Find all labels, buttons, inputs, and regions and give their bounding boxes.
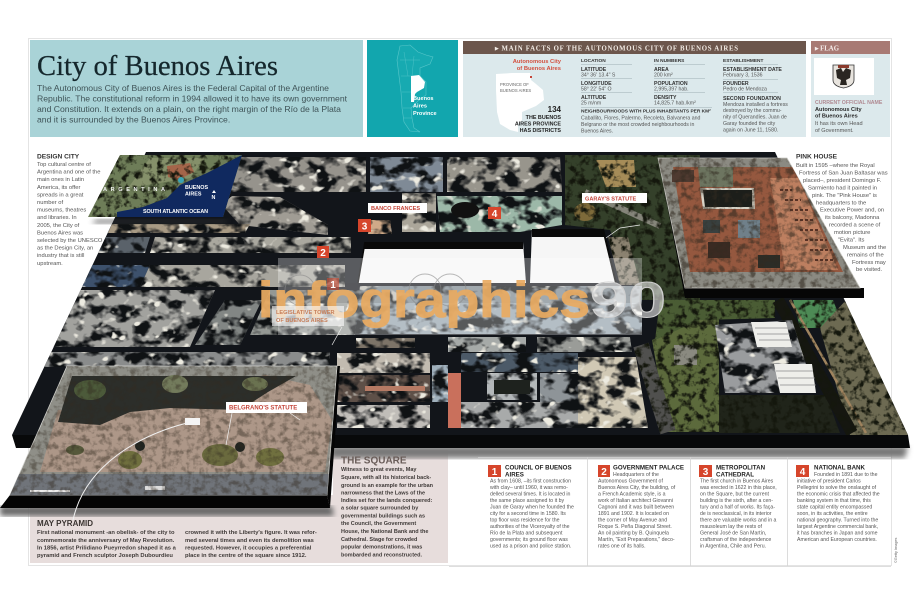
label: Autonomous City of Buenos Aires: Autonomous City bbox=[513, 59, 562, 65]
label: South Atlantic Ocean: SOUTH ATLANTIC OCEAN bbox=[143, 209, 208, 215]
label: province of Buenos Aires: PROVINCE OF bbox=[500, 82, 529, 87]
flag text: Autonomous City bbox=[815, 107, 862, 113]
label: Banco Frances: BANCO FRANCES bbox=[371, 206, 420, 212]
main aerial view of the city bbox=[12, 152, 910, 458]
districts figure: 134 bbox=[548, 105, 562, 114]
text: Pink House: be visited. bbox=[856, 267, 882, 273]
facts column: in numbers: DENSITY bbox=[654, 95, 677, 101]
text: May Pyramid: requested. However, it occupies a preferential bbox=[185, 546, 312, 552]
icon: north arrow bbox=[212, 190, 216, 201]
text: The Square: Indies set for the lands conquered: bbox=[341, 498, 433, 504]
introduction text: and Constitution. It extends on a plain, on the right margin of the Río de la Plata bbox=[37, 104, 341, 114]
districts figure: AIRES PROVINCE bbox=[515, 122, 561, 128]
facts column: in numbers: AREA bbox=[654, 67, 669, 73]
body: a French Academic style, is a bbox=[598, 492, 666, 498]
marker 4: 4 bbox=[492, 209, 498, 220]
text: The Square: Witness to great events, May bbox=[341, 467, 417, 473]
text: Pink House: PINK HOUSE bbox=[796, 154, 838, 160]
facts column: location: ALTITUDE bbox=[581, 95, 607, 101]
text: May Pyramid bbox=[37, 519, 317, 559]
text: The Square bbox=[341, 456, 434, 558]
body: top floor was residence for the bbox=[490, 518, 560, 524]
facts column: location: 58° 22' 54" O bbox=[581, 86, 612, 92]
heading: NATIONAL BANK bbox=[814, 464, 866, 472]
text: The Square: narrowness that the Laws of the bbox=[341, 490, 425, 496]
facts heading bar bbox=[463, 41, 806, 54]
label: Garay's Statute: GARAY'S STATUTE bbox=[585, 196, 637, 202]
text: May Pyramid: First national monument -an obelisk- of the city to bbox=[37, 530, 175, 536]
body: state capital entity encompassed bbox=[797, 504, 872, 510]
facts column: establishment: Mendoza installed a fortress bbox=[723, 102, 788, 108]
map: Buenos Aires Province silhouette bbox=[496, 73, 544, 132]
label: Buenos Aires Province: Aires bbox=[413, 104, 427, 110]
text: Pink House: Fortress may bbox=[852, 260, 886, 266]
body: national geography. Turned into the bbox=[797, 518, 878, 524]
body: rates one of its halls. bbox=[598, 544, 646, 550]
watermark bbox=[258, 258, 666, 335]
body: An oil painting by B. Quinquela bbox=[598, 530, 669, 536]
column: National Bank bbox=[796, 464, 880, 543]
body: delled several times. It is located in bbox=[490, 492, 571, 498]
text: Pink House: "Evita". Its bbox=[838, 238, 864, 244]
facts column: in numbers: 200 km² bbox=[654, 72, 673, 78]
facts column: in numbers: 14,825.7 hab./km² bbox=[654, 100, 696, 106]
body: in Argentina, Chile and Peru. bbox=[700, 544, 766, 550]
facts column: establishment: ESTABLISHMENT bbox=[723, 58, 763, 64]
facts column: in numbers: POPULATION bbox=[654, 81, 688, 87]
icon: north arrow: N bbox=[212, 195, 216, 201]
number 4: 4 bbox=[800, 467, 806, 478]
locator map panel: Buenos Aires Province bbox=[367, 40, 458, 137]
text: The Square: a solar square surrounded by bbox=[341, 506, 419, 512]
flag text: of Government. bbox=[815, 128, 854, 134]
text: Design City: spreads in a great bbox=[37, 192, 84, 198]
facts column: in numbers bbox=[581, 58, 712, 108]
text: Design City: as the Design City, an bbox=[37, 246, 93, 252]
body: banking system in that time, this bbox=[797, 498, 871, 504]
text: Design City bbox=[37, 154, 103, 267]
text: Pink House: Fortress of San Juan Baltasar was bbox=[799, 170, 888, 176]
districts figure: THE BUENOS bbox=[526, 115, 561, 121]
facts column: location bbox=[581, 58, 632, 106]
text: May Pyramid: commemorate the anniversary of May Revolution. bbox=[37, 538, 175, 544]
text: May Pyramid: In 1856, artist Prilidiano Pueyrredon shaped it as a bbox=[37, 546, 177, 552]
label: Legislative Tower of Buenos Aires: OF BUENOS AIRES bbox=[276, 318, 328, 324]
marker 2: 2 bbox=[320, 248, 326, 259]
inset aerial: Pink House bbox=[650, 155, 870, 298]
flag text: It has its own Head bbox=[815, 121, 863, 127]
body: governments; its ground floor was bbox=[490, 537, 568, 543]
number 1: 1 bbox=[492, 467, 498, 478]
body: the economic crisis that affected the bbox=[797, 492, 880, 498]
text: Pink House: placed–, president Domingo F. bbox=[803, 178, 882, 184]
facts heading bar: ▸ MAIN FACTS OF THE AUTONOMOUS CITY OF BUENOS AIRES bbox=[494, 46, 738, 52]
text: Design City: upstream. bbox=[37, 261, 63, 267]
text: Pink House: pink. The "Pink House" is bbox=[812, 193, 877, 199]
column: Metropolitan Cathedral bbox=[699, 464, 777, 550]
body: used as a prison and police station. bbox=[490, 544, 571, 550]
body: building is the sixth, after a cen- bbox=[700, 498, 773, 504]
parks and green areas bbox=[565, 155, 908, 435]
text: Pink House bbox=[796, 154, 888, 273]
text: The Square: THE SQUARE bbox=[341, 456, 407, 466]
body: there are valuable works and in a bbox=[700, 518, 777, 524]
body: on the Square, but the current bbox=[700, 492, 769, 498]
city blocks bbox=[40, 157, 815, 428]
body: General José de San Martín, bbox=[700, 530, 766, 536]
panel: flag bbox=[811, 41, 890, 137]
marker 2 bbox=[317, 246, 329, 259]
body: soon, in its activities, the entire bbox=[797, 511, 868, 517]
text: Pink House: Built in 1595 –where the Royal bbox=[796, 163, 875, 169]
body: tury and a half of works. Its faça- bbox=[700, 504, 775, 510]
inset aerial: May Square bbox=[0, 360, 340, 516]
leader line: Garay's statute bbox=[606, 225, 640, 238]
body: largest Argentine commercial bank, bbox=[797, 524, 878, 530]
label: Legislative Tower of Buenos Aires bbox=[272, 306, 344, 326]
text: Design City: industry that is still bbox=[37, 253, 84, 259]
body: The first church in Buenos Aires bbox=[700, 478, 774, 484]
body: Pellegrini to solve the onslaught of bbox=[797, 485, 877, 491]
heading: COUNCIL OF BUENOS bbox=[505, 464, 572, 472]
facts: neighbourhoods: Buenos Aires. bbox=[581, 128, 613, 134]
text: Pink House: recorded a scene of bbox=[829, 223, 881, 229]
heading: CATHEDRAL bbox=[716, 472, 754, 478]
label: Buenos Aires: AIRES bbox=[185, 192, 202, 198]
text: The Square: bombarded and reconstructed. bbox=[341, 552, 422, 558]
flag image bbox=[814, 58, 874, 95]
facts column: location: 34° 36' 13.4" S bbox=[581, 72, 616, 78]
text: May Pyramid: med several times and even its demolition was bbox=[185, 538, 314, 544]
introduction text: and it is surrounded by the Buenos Aires Province. bbox=[37, 114, 230, 124]
label: Buenos Aires: BUENOS bbox=[185, 185, 208, 191]
text: Design City: Buenos Aires was bbox=[37, 230, 83, 236]
body: Juan de Garay when he founded the bbox=[490, 504, 574, 510]
column: Council of Buenos Aires bbox=[488, 464, 574, 550]
body: initiative of president Carlos bbox=[797, 478, 861, 484]
text: Design City: DESIGN CITY bbox=[37, 154, 80, 160]
number 3: 3 bbox=[703, 467, 709, 478]
label: Garay's Statute bbox=[582, 193, 647, 203]
label: province of Buenos Aires: BUENOS AIRES bbox=[500, 88, 531, 93]
facts column: location: LONGITUDE bbox=[581, 81, 612, 87]
text: May Pyramid: place in the centre of the square since 1912. bbox=[185, 553, 307, 559]
text: May Pyramid: pyramid and French sculptor Joseph Dubourdieu bbox=[37, 553, 173, 559]
map: Buenos Aires Province highlighted bbox=[411, 75, 425, 102]
current official name: CURRENT OFFICIAL NAME bbox=[815, 100, 883, 106]
text: The Square: the Council, the Government bbox=[341, 521, 416, 527]
facts column: establishment: again on June 11, 1580. bbox=[723, 128, 778, 134]
body: de is neoclassical, in its interior bbox=[700, 511, 772, 517]
text: Design City: Top cultural centre of bbox=[37, 162, 91, 168]
facts: neighbourhoods bbox=[581, 108, 711, 134]
body: Roque S. Peña Diagonal Street. bbox=[598, 524, 672, 530]
facts column: establishment: February 3, 1536 bbox=[723, 72, 763, 78]
text: May Pyramid: MAY PYRAMID bbox=[37, 519, 93, 528]
text: Design City: main ones in Latin bbox=[37, 177, 84, 183]
body: authorities of the Viceroyalty of the bbox=[490, 524, 570, 530]
text: The Square: Cathedral. Stage for crowded bbox=[341, 537, 417, 543]
text: Design City: museums, theatres bbox=[37, 208, 86, 214]
body: Cagnoni and it was built between bbox=[598, 504, 674, 510]
label: Belgrano's Statute bbox=[226, 402, 307, 413]
number 2: 2 bbox=[601, 467, 607, 478]
label: Buenos Aires Province: Buenos bbox=[413, 96, 434, 102]
Autonomous City marker bbox=[530, 76, 532, 78]
body: mausoleum lay the rests of bbox=[700, 524, 763, 530]
text: Design City: Argentina and one of the bbox=[37, 170, 100, 176]
facts column: establishment: Pedro de Mendoza bbox=[723, 86, 767, 92]
body: craftsman of the independence bbox=[700, 537, 771, 543]
title: City of Buenos Aires bbox=[37, 51, 278, 82]
leader line: legislative tower bbox=[332, 327, 342, 345]
label: Buenos Aires Province: Province bbox=[413, 111, 437, 117]
facts column: establishment: FOUNDER bbox=[723, 81, 749, 87]
text: Pink House: motion picture bbox=[834, 230, 870, 236]
text: The Square: Square, with all its historical back- bbox=[341, 475, 431, 481]
text: Design City: selected by the UNESCO bbox=[37, 238, 103, 244]
facts column: location: LATITUDE bbox=[581, 67, 607, 73]
facts: neighbourhoods: Belgrano or the most crowded neighbourhoods in bbox=[581, 122, 694, 128]
flag text: of Buenos Aires bbox=[815, 114, 858, 120]
facts column: location: LOCATION bbox=[581, 58, 606, 64]
marker 1: 1 bbox=[330, 280, 336, 291]
text: Pink House: remains of the bbox=[847, 252, 884, 258]
body: Martín, "Exit Preparations," deco- bbox=[598, 537, 675, 543]
watermark: infographics bbox=[258, 272, 590, 328]
flag heading bar: ▸ FLAG bbox=[814, 46, 840, 52]
marker 1 bbox=[327, 278, 339, 291]
facts column: location: 25 m/nm bbox=[581, 100, 601, 106]
heading: AIRES bbox=[505, 472, 524, 478]
body: the same place assigned to it by bbox=[490, 498, 565, 504]
text: The Square: popular demonstrations, it was bbox=[341, 545, 422, 551]
body: with clay– until 1960, it was remo- bbox=[490, 485, 568, 491]
body: the corner of May Avenue and bbox=[598, 518, 667, 524]
leader line: May Pyramid bbox=[73, 423, 187, 520]
text: May Pyramid: crowned it with the Liberty's figure. It was refor- bbox=[185, 530, 317, 536]
body: it has branches in Japan and some bbox=[797, 530, 878, 536]
facts column: establishment: ESTABLISHMENT DATE bbox=[723, 67, 782, 73]
facts column: establishment: Garay founded the city bbox=[723, 121, 776, 127]
body: Headquarters of the bbox=[613, 472, 659, 478]
text: The Square: ground is an example for the urban bbox=[341, 483, 434, 489]
text: Pink House: Sarmiento had it painted in bbox=[808, 185, 877, 191]
inset map: Argentina and South Atlantic Ocean bbox=[88, 155, 242, 224]
text: Design City: and libraries. In bbox=[37, 215, 77, 221]
body: Buenos Aires City, the building, of bbox=[598, 485, 676, 491]
facts column: establishment bbox=[723, 58, 788, 134]
facts column: establishment: destroyed by the commu- bbox=[723, 108, 782, 114]
body: Founded in 1891 due to the bbox=[814, 472, 878, 478]
text: Pink House: Executive Power and, on bbox=[820, 208, 884, 214]
label: Banco Frances bbox=[368, 203, 427, 213]
body: work of Italian architect Giovanni bbox=[598, 498, 673, 504]
text: Pink House: its balcony, Madonna bbox=[825, 215, 880, 221]
header panel: title and introduction bbox=[30, 40, 363, 137]
body: American and European countries. bbox=[797, 537, 877, 543]
marker 4 bbox=[488, 207, 501, 220]
marker 3: 3 bbox=[362, 222, 368, 232]
body: Río de la Plata and subsequent bbox=[490, 530, 563, 536]
empty building footprint: left bbox=[358, 242, 526, 283]
facts column: in numbers: IN NUMBERS bbox=[654, 58, 685, 64]
facts column: in numbers: 2,995,397 hab. bbox=[654, 86, 689, 92]
text: The Square: governmental buildings such as bbox=[341, 514, 425, 520]
text: Pink House: headquarters to the bbox=[816, 200, 866, 206]
panel: main facts bbox=[463, 41, 806, 137]
text: The Square: House, the National Bank and the bbox=[341, 529, 428, 535]
facts column: establishment: nity of Querandíes. Juan de bbox=[723, 114, 787, 120]
label: Belgrano's Statute: BELGRANO'S STATUTE bbox=[229, 406, 297, 412]
text: Design City: 2005, the City of bbox=[37, 223, 80, 229]
text: Design City: number of bbox=[37, 200, 63, 206]
heading: METROPOLITAN bbox=[716, 464, 766, 472]
panel: The Square and May Pyramid background bbox=[30, 450, 448, 563]
facts: neighbourhoods: Caballito, Flores, Palermo, Recoleta, Balvanera and bbox=[581, 116, 700, 122]
leader line: Belgrano's statute bbox=[226, 413, 300, 445]
heading: GOVERNMENT PALACE bbox=[613, 464, 684, 472]
map: outline of Argentina bbox=[397, 45, 433, 132]
body: 1891 and 1902. It is located on bbox=[598, 511, 669, 517]
districts figure: HAS DISTRICTS bbox=[520, 128, 561, 134]
introduction text: The Autonomous City of Buenos Aires is the Federal Capital of the Argentine bbox=[37, 83, 329, 93]
watermark: 90 bbox=[590, 272, 666, 328]
label: Autonomous City of Buenos Aires: of Buenos Aires bbox=[517, 66, 561, 72]
facts: neighbourhoods: NEIGHBOURHOODS WITH PLUS INHABITANTS PER KM² bbox=[581, 108, 711, 114]
text: Design City: America, its offer bbox=[37, 185, 80, 191]
body: city for a second time in 1580. Its bbox=[490, 511, 566, 517]
body: Autonomous Government of bbox=[598, 478, 663, 484]
marker 3 bbox=[358, 219, 371, 232]
body: was erected in 1622 in this place, bbox=[700, 485, 777, 491]
introduction text: Republic. The constitutional reform in 1994 allowed it to have its own government bbox=[37, 94, 348, 104]
statue marker bbox=[185, 418, 200, 425]
empty building footprint: right bbox=[530, 229, 616, 283]
body: As from 1608, –its first construction bbox=[490, 478, 571, 484]
label: Legislative Tower of Buenos Aires: LEGISLATIVE TOWER bbox=[276, 310, 335, 316]
text: Pink House: Museum and the bbox=[843, 245, 886, 251]
column: Government Palace bbox=[598, 464, 684, 550]
label: Argentina: ARGENTINA bbox=[103, 187, 165, 193]
facts column: establishment: SECOND FOUNDATION bbox=[723, 96, 781, 102]
credit: ©Getty Images bbox=[894, 538, 898, 563]
